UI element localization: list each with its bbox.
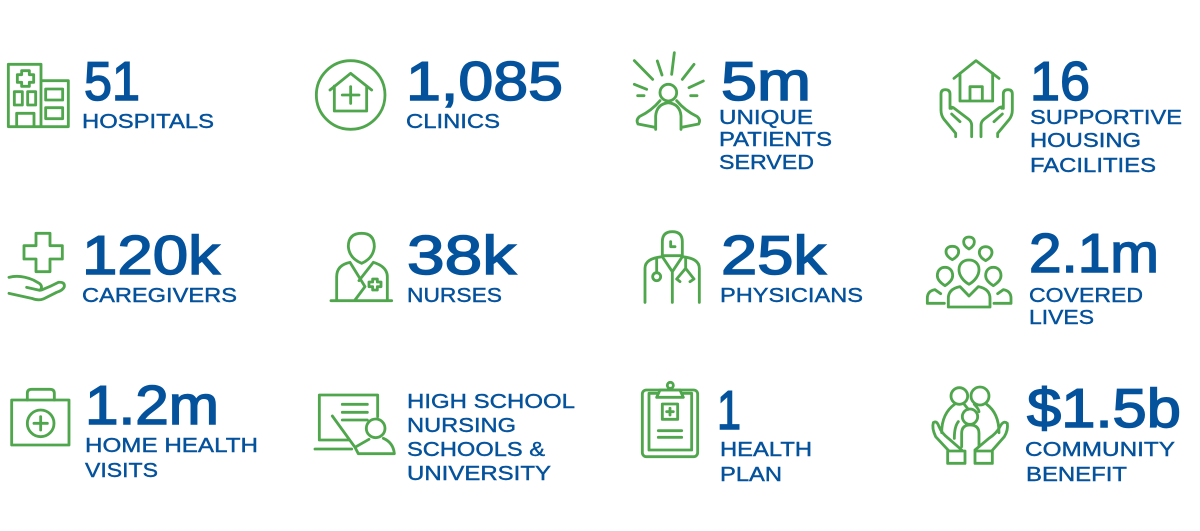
icon: teacher at board [315, 395, 394, 454]
stat: 2.1m covered lives [927, 222, 1159, 329]
label: supportive housing facilities: FACILITIES [1030, 155, 1156, 177]
label: covered lives [1029, 285, 1143, 329]
icon: clinic house in circle [316, 61, 385, 129]
icon: house held by hands [941, 61, 1012, 137]
stat: 51 hospitals [8, 50, 214, 133]
stat: 1 health plan [642, 379, 812, 486]
icon: nurse [331, 233, 392, 301]
label: hospitals: HOSPITALS [82, 111, 214, 133]
number: 1,085: 1,085 [406, 50, 563, 112]
stat: 1.2m home health visits [12, 374, 258, 482]
icon: cross over open hand [9, 233, 64, 300]
label: community benefit [1025, 439, 1175, 486]
label: health plan [720, 439, 812, 486]
label: nurses: NURSES [407, 285, 502, 307]
stat: high school nursing schools and university [315, 391, 575, 485]
number: $1.5b: $1.5b [1027, 377, 1181, 439]
label: high school nursing schools and university: SCHOOLS & [407, 439, 546, 461]
label: community benefit: COMMUNITY [1025, 439, 1175, 461]
label: clinics: CLINICS [406, 111, 500, 133]
label: home health visits: HOME HEALTH [85, 435, 258, 457]
number: 2.1m: 2.1m [1029, 222, 1159, 284]
label: high school nursing schools and university: HIGH SCHOOL [407, 391, 575, 413]
label: high school nursing schools and university: NURSING [407, 415, 516, 437]
stat: 16 supportive housing facilities [941, 50, 1182, 177]
label: home health visits [85, 435, 258, 482]
number: 25k: 25k [721, 224, 827, 286]
label: unique patients served: SERVED [719, 152, 814, 174]
label: high school nursing schools and university: UNIVERSITY [407, 463, 551, 485]
number: 16: 16 [1030, 50, 1090, 112]
label: health plan: PLAN [720, 464, 782, 486]
label: supportive housing facilities: SUPPORTIVE [1030, 107, 1182, 129]
stat: 5m unique patients served [634, 50, 832, 174]
label: unique patients served [719, 107, 832, 174]
label: covered lives: COVERED [1029, 285, 1143, 307]
label: health plan: HEALTH [720, 439, 812, 461]
stat: 25k physicians [645, 224, 863, 307]
label: home health visits: VISITS [85, 460, 158, 482]
label: unique patients served: UNIQUE [719, 107, 813, 129]
icon: hospital building [8, 64, 68, 127]
icon: medical kit [12, 389, 69, 445]
icon: physician with stethoscope [645, 232, 699, 302]
label: community benefit: BENEFIT [1026, 464, 1127, 486]
number: 51: 51 [84, 50, 140, 112]
label: high school nursing schools and university [407, 391, 575, 485]
icon: person with radiating lines [634, 53, 703, 129]
label: physicians: PHYSICIANS [720, 285, 863, 307]
label: unique patients served: PATIENTS [719, 129, 832, 151]
label: supportive housing facilities [1030, 107, 1182, 177]
stat: 38k nurses [331, 224, 517, 307]
stat: 1,085 clinics [316, 50, 563, 133]
number: 38k: 38k [407, 224, 517, 286]
number: 1: 1 [717, 379, 741, 441]
number: 120k: 120k [82, 224, 221, 286]
number: 1.2m: 1.2m [85, 374, 219, 436]
icon: clipboard [642, 382, 698, 457]
stat: $1.5b community benefit [933, 377, 1181, 486]
label: caregivers: CAREGIVERS [82, 285, 237, 307]
number: 5m: 5m [721, 50, 811, 112]
icon: family in hands [933, 387, 1008, 463]
icon: group of people [927, 237, 1011, 307]
label: supportive housing facilities: HOUSING [1030, 130, 1141, 152]
label: covered lives: LIVES [1029, 307, 1094, 329]
stat: 120k caregivers [9, 224, 237, 307]
